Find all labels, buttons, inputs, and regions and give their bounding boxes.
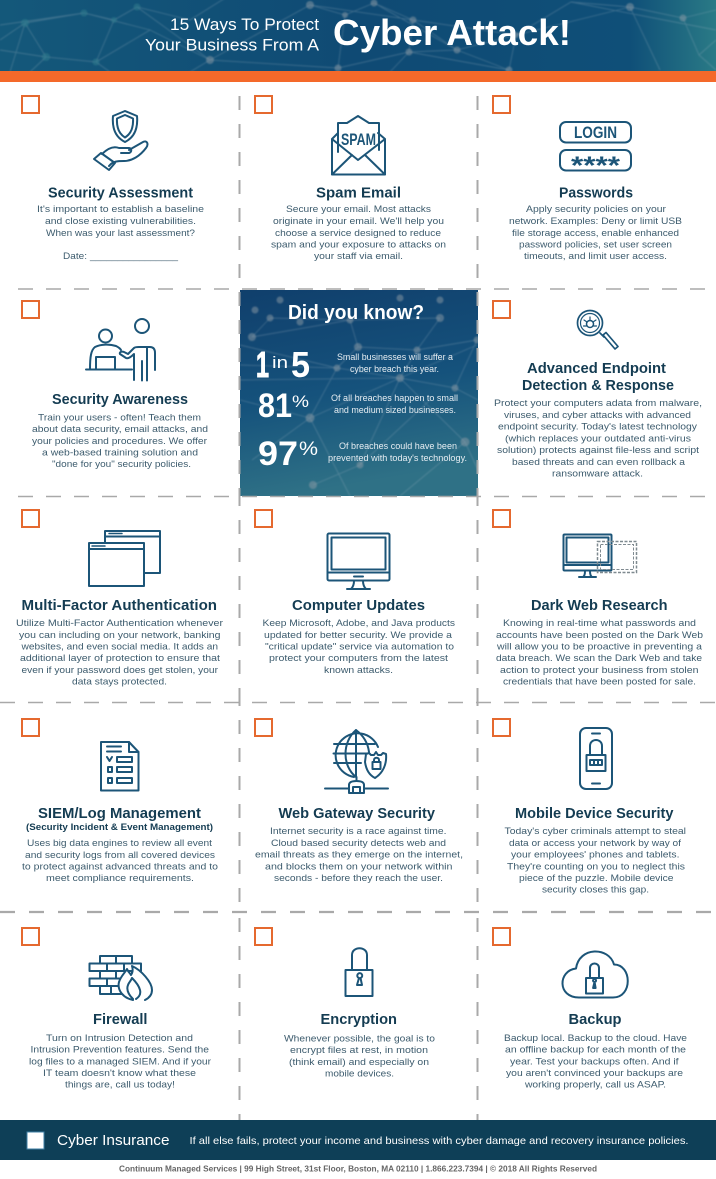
panel: advanced endpoint detection [493, 301, 702, 480]
icon: browser windows [89, 531, 160, 586]
icon: desktop monitor [328, 534, 390, 589]
panel: passwords [493, 96, 682, 262]
stat: 97 percent: 97 [258, 435, 298, 473]
panel: security assessment [22, 96, 204, 262]
body text: Internet security is a race against time. [270, 826, 446, 837]
body text: mobile devices. [325, 1068, 394, 1080]
body text: (which replaces your outdated anti-virus [505, 434, 691, 444]
body text: originate in your email. We'll help you [273, 216, 444, 227]
stat caption: small businesses: cyber breach this year. [350, 364, 439, 374]
body text: choose a service designed to reduce [275, 228, 441, 239]
body text: action to protect your business from stolen [500, 665, 698, 676]
panel: spam email [255, 96, 446, 262]
checkbox [22, 510, 39, 527]
panel: security awareness [22, 301, 208, 470]
body text: It's important to establish a baseline [37, 204, 204, 215]
stat: 1 in 5 [256, 344, 310, 385]
body text: updated for better security. We provide a [264, 630, 453, 641]
body text [29, 1033, 211, 1090]
checkbox [493, 510, 510, 527]
body text [16, 618, 223, 688]
body text: Today's cyber criminals attempt to steal [504, 826, 686, 837]
body text: seconds - before they reach the user. [274, 873, 443, 884]
heading: Detection & Response [522, 378, 674, 394]
body text: email threats as they emerge on the internet, [255, 850, 463, 860]
stat caption: all breaches: Of all breaches happen to small [331, 393, 458, 403]
body text: Keep Microsoft, Adobe, and Java products [262, 618, 455, 629]
panel: multi-factor authentication [16, 510, 223, 688]
subheading: (Security Incident & Event Management) [26, 822, 213, 833]
body text: your staff via email. [314, 251, 403, 262]
body text [284, 1034, 435, 1080]
panel: mobile device security [493, 719, 686, 896]
body text: ________________ [89, 251, 179, 262]
stat: 81 percent: 81 [258, 387, 292, 425]
stat caption: all breaches [331, 393, 458, 415]
body text: your employees' phones and tablets. [511, 850, 680, 860]
stat: 1 in 5: in [272, 353, 288, 372]
body text [255, 826, 463, 884]
icon: phone with padlock [580, 728, 612, 789]
body text: password policies, set user screen [519, 240, 672, 250]
title: lead-in line one: 15 Ways To Protect [170, 15, 319, 34]
panel: encryption [255, 928, 435, 1080]
body text: accounts have been posted on the Dark Web [496, 630, 703, 641]
body text: a web-based training solution and [42, 448, 198, 458]
stat caption: preventable breaches: prevented with today's technology. [328, 453, 467, 463]
body text: Intrusion Prevention features. Send the [30, 1044, 209, 1056]
panel: siem log management [22, 719, 218, 884]
body text: Date: [63, 251, 87, 262]
heading: Advanced Endpoint [527, 361, 666, 377]
body text: file storage access, enable enhanced [512, 228, 679, 239]
body text [504, 1033, 687, 1090]
cyber insurance band [0, 1120, 716, 1160]
body text: and security logs from all covered devices [25, 850, 215, 861]
body text: solution) protects against file-less and script [497, 445, 699, 456]
stat: 81 percent: % [292, 392, 309, 411]
body text: timeouts, and limit user access. [524, 251, 667, 262]
body text: additional layer of protection to ensure that [20, 653, 220, 664]
body text: to protect against advanced threats and to [22, 862, 218, 872]
heading: Security Awareness [52, 392, 188, 408]
body text: Cloud based security detects web and [271, 838, 446, 849]
stat caption: all breaches: and medium sized businesses. [334, 405, 456, 415]
body text: data stays protected. [72, 676, 167, 688]
body text [504, 826, 686, 896]
body text: encrypt files at rest, in motion [290, 1045, 428, 1056]
icon: brick wall with flame [90, 956, 152, 1000]
body text: and close existing vulnerabilities. [45, 216, 196, 227]
checkbox [27, 1132, 44, 1149]
title: lead-in line two: Your Business From A [145, 36, 320, 54]
body text [37, 204, 204, 262]
panel: web gateway security [255, 719, 463, 884]
body text: Knowing in real-time what passwords and [503, 618, 696, 629]
body text: you can including on your network, banking [19, 630, 221, 641]
body text: log files to a managed SIEM. And if your [29, 1056, 211, 1068]
checkbox [22, 96, 39, 113]
icon: shield and hand [94, 111, 147, 170]
icon: spam envelope [332, 116, 385, 174]
body text: protect your computers from the latest [269, 653, 448, 664]
icon: globe with shield and gateway [325, 730, 388, 793]
body text [271, 204, 446, 262]
body text: meet compliance requirements. [46, 873, 194, 884]
icon: login fields: LOGIN [574, 124, 617, 142]
checkbox [22, 301, 39, 318]
body text: Train your users - often! Teach them [38, 412, 201, 424]
title: Cyber Attack: Cyber Attack! [333, 12, 571, 53]
insurance message: If all else fails, protect your income and business with cyber damage and recovery insurance policies. [190, 1135, 688, 1147]
icon: login fields: **** [571, 152, 620, 180]
body text: Secure your email. Most attacks [286, 204, 431, 215]
panel: firewall [22, 928, 211, 1090]
heading: Mobile Device Security [515, 806, 674, 822]
body text: piece of the puzzle. Mobile device [519, 873, 674, 884]
body text: credentials that have been posted for sale. [503, 676, 696, 688]
heading: Web Gateway Security [278, 806, 435, 822]
heading: Encryption [320, 1012, 397, 1028]
header banner [0, 0, 716, 74]
body text: When was your last assessment? [46, 228, 195, 239]
icon: trainer and user [86, 319, 155, 380]
body text: IT team doesn't know what these [43, 1068, 196, 1079]
stat caption: preventable breaches: Of breaches could have been [339, 441, 457, 451]
body text [32, 412, 208, 470]
checkbox [493, 719, 510, 736]
body text: endpoint security. Today's latest technology [498, 422, 697, 432]
body text: Uses big data engines to review all event [27, 838, 212, 849]
body text: Whenever possible, the goal is to [284, 1034, 435, 1044]
stat: 1 in 5: 1 [256, 344, 269, 385]
icon: cloud with padlock [562, 951, 628, 998]
heading: Backup [568, 1012, 622, 1028]
icon: spam envelope: SPAM [341, 130, 376, 149]
body text: working properly, call us ASAP. [524, 1080, 666, 1090]
body text [22, 838, 218, 884]
stat caption: preventable breaches [328, 441, 467, 463]
body text: They're counting on you to neglect this [507, 862, 685, 872]
panel: computer updates [255, 510, 455, 676]
stat: 97 percent: % [299, 439, 318, 460]
checkbox [22, 719, 39, 736]
heading: did you know: Did you know? [288, 302, 424, 324]
panel: backup [493, 928, 687, 1090]
body text: security closes this gap. [542, 884, 649, 896]
icon: magnifier with bug [578, 310, 618, 349]
body text: based threats and can even rollback a [512, 457, 686, 468]
body text [494, 398, 702, 480]
body text: websites, and even social media. It adds an [20, 642, 218, 652]
heading: Spam Email [316, 186, 401, 202]
body text: Utilize Multi-Factor Authentication whenever [16, 618, 223, 629]
body text: even if your password does get stolen, your [22, 665, 218, 676]
heading: cyber insurance: Cyber Insurance [57, 1132, 170, 1149]
body text: you aren't convinced your backups are [506, 1068, 683, 1079]
checkbox [493, 96, 510, 113]
checkbox [493, 928, 510, 945]
body text: known attacks. [324, 665, 393, 676]
body text: Protect your computers adata from malware, [494, 398, 702, 409]
body text: viruses, and cyber attacks with advanced [504, 410, 691, 421]
icon: padlock [346, 948, 372, 996]
body text: things are, call us today! [65, 1080, 175, 1090]
stat: 97 percent [258, 435, 318, 473]
stat caption: small businesses [337, 352, 453, 374]
heading: Firewall [93, 1012, 148, 1028]
icon: log document [101, 742, 138, 790]
body text: your policies and procedures. We offer [32, 436, 207, 447]
heading [522, 361, 674, 394]
heading: SIEM/Log Management [38, 806, 201, 822]
body text: an offline backup for each month of the [505, 1044, 686, 1056]
checkbox [255, 96, 272, 113]
body text: and blocks them on your network within [265, 862, 452, 872]
icon: monitor with dashed window [564, 534, 636, 577]
body text: ransomware attack. [552, 468, 643, 480]
icon: login fields [560, 122, 631, 180]
heading: Passwords [559, 186, 633, 202]
heading: Multi-Factor Authentication [22, 598, 217, 614]
body text: data breach. We scan the Dark Web and take [496, 653, 702, 664]
checkbox [22, 928, 39, 945]
body text: Turn on Intrusion Detection and [46, 1033, 193, 1044]
body text: Apply security policies on your [526, 204, 666, 215]
body text: "critical update" service via automation to [265, 642, 454, 652]
body text: spam and your exposure to attacks on [271, 240, 446, 250]
body text [262, 618, 455, 676]
footer contact line: Continuum Managed Services | 99 High Street, 31st Floor, Boston, MA 02110 | 1.866.223.7394 | © 2018 All Rights Reserved [119, 1164, 597, 1174]
checkbox [493, 301, 510, 318]
body text: "done for you" security policies. [52, 459, 191, 470]
stat: 1 in 5: 5 [291, 344, 310, 385]
orange header stripe [0, 71, 716, 82]
panel: dark web research [493, 510, 703, 688]
body text [496, 618, 703, 688]
body text: data or access your network by way of [509, 838, 681, 849]
body text: about data security, email attacks, and [32, 424, 208, 435]
did you know panel [240, 290, 480, 496]
checkbox [255, 719, 272, 736]
body text: (think email) and especially on [289, 1057, 429, 1068]
body text: will allow you to be proactive in preventing a [496, 642, 703, 652]
body text: year. Test your backups often. And if [510, 1056, 679, 1068]
body text: network. Examples: Deny or limit USB [509, 216, 682, 227]
heading: Dark Web Research [531, 598, 668, 614]
body text [509, 204, 682, 262]
stat caption: small businesses: Small businesses will suffer a [337, 352, 453, 362]
checkbox [255, 510, 272, 527]
heading: Computer Updates [292, 598, 425, 614]
checkbox [255, 928, 272, 945]
heading: Security Assessment [48, 186, 193, 202]
body text: Backup local. Backup to the cloud. Have [504, 1033, 687, 1044]
